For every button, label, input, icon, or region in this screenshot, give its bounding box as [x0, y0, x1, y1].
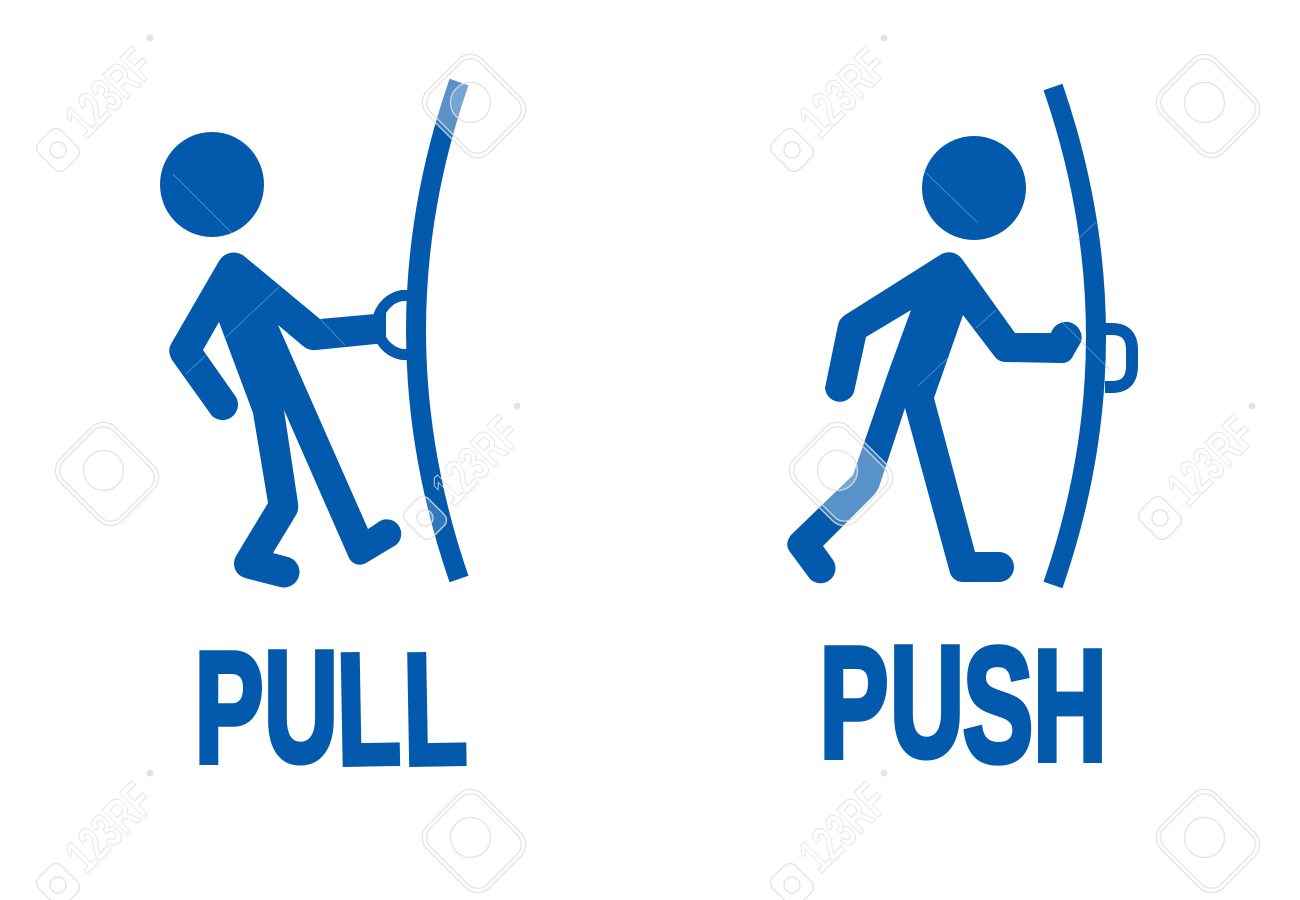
heading: PUSH: S	[963, 615, 1033, 797]
watermark: top-right logo: 123RF	[788, 37, 898, 148]
icon: pull door panel	[416, 82, 459, 579]
watermark: middle-center logo	[400, 402, 531, 543]
heading: PUSH: P	[819, 615, 889, 791]
watermark: top-left logo	[33, 34, 164, 175]
icon: push figure body	[787, 252, 1082, 583]
icon: pull door handle	[377, 296, 408, 354]
watermark: bottom-far-right camera	[1149, 782, 1267, 900]
heading: PUSH	[819, 614, 1107, 797]
seam lines on pull figure	[173, 174, 345, 374]
heading: PULL: L	[335, 621, 402, 798]
watermark: bottom-left logo: 123RF	[54, 772, 164, 883]
watermark: bottom-right logo: 123RF	[788, 772, 898, 883]
icon: pull figure head	[160, 132, 264, 237]
icon: pull figure body	[169, 253, 401, 588]
heading: PULL: L	[402, 621, 468, 798]
watermark: middle-right camera	[782, 415, 900, 533]
heading: PULL: U	[264, 619, 338, 795]
heading: PULL	[194, 619, 468, 798]
watermark: bottom-center camera	[415, 782, 533, 900]
icon: push figure head	[922, 136, 1026, 240]
watermark: middle-center logo: 123RF	[421, 405, 531, 516]
panel: pull sign	[160, 82, 459, 588]
seam lines on push figure	[918, 170, 1110, 386]
watermark: far-right camera	[1149, 47, 1267, 165]
watermark: middle-far-right logo: 123RF	[1156, 405, 1266, 516]
panel: push sign	[787, 87, 1132, 585]
icon: push door handle	[1105, 329, 1132, 387]
watermark: top-left logo: 123RF	[54, 37, 164, 148]
watermark: bottom-right logo	[767, 770, 898, 900]
watermark: middle-left camera	[48, 415, 166, 533]
watermark: top-right logo	[767, 34, 898, 175]
watermark: middle-far-right logo	[1135, 402, 1266, 543]
heading: PUSH: U	[890, 614, 964, 790]
heading: PULL: P	[194, 620, 264, 796]
heading: PUSH: H	[1033, 619, 1107, 794]
watermark: top-center camera	[415, 47, 533, 165]
watermark: bottom-left logo	[33, 770, 164, 900]
icon: push door panel	[1053, 87, 1096, 585]
